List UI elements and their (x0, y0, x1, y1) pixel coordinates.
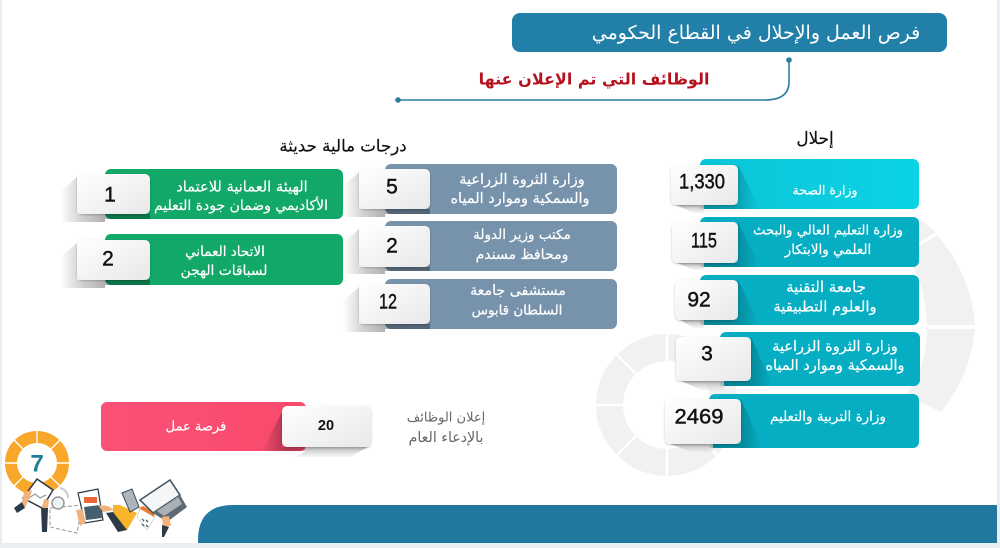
card: job opportunity: 20 (318, 418, 334, 434)
decorative large ring (905, 216, 975, 412)
heading: replacement: إحلال (796, 128, 834, 148)
card: camel racing federation: لسباقات الهجن (181, 263, 267, 279)
card: technology university: جامعة التقنية (786, 278, 866, 296)
card: accreditation authority: الأكاديمي وضمان جودة التعليم (154, 196, 328, 214)
card: higher education (672, 217, 919, 270)
card: agriculture (676, 332, 920, 390)
card: accreditation authority (60, 169, 343, 222)
card: sultan qaboos hospital: السلطان قابوس (472, 304, 562, 318)
card: job opportunity (101, 402, 371, 457)
title banner: فرص العمل والإحلال في القطاع الحكومي (592, 22, 920, 44)
card: camel racing federation: 2 (102, 248, 114, 270)
card: sultan qaboos hospital (343, 279, 617, 332)
bottom bar (198, 505, 997, 543)
card: education (665, 394, 919, 452)
card: higher education: وزارة التعليم العالي والبحث (753, 224, 903, 238)
card: education: 2469 (674, 406, 724, 428)
card: minister of state office: مكتب وزير الدولة (473, 227, 571, 243)
text: public prosecution job ads (407, 410, 485, 446)
card: minister of state office: 2 (386, 234, 398, 258)
card: sultan qaboos hospital: مستشفى جامعة (470, 283, 566, 299)
card: sultan qaboos hospital: 12 (379, 290, 397, 314)
card: agriculture: والسمكية وموارد المياه (765, 358, 905, 374)
card: health (671, 159, 919, 213)
card: health: وزارة الصحة (792, 182, 858, 198)
icon: numbered ring (5, 431, 69, 495)
card: agriculture grades: والسمكية وموارد المياه (450, 191, 590, 207)
card: camel racing federation: الاتحاد العماني (185, 244, 265, 260)
heading: recent financial grades: درجات مالية حديثة (279, 136, 407, 156)
card: technology university: والعلوم التطبيقية (773, 298, 877, 316)
card: agriculture: وزارة الثروة الزراعية (772, 339, 898, 355)
card: camel racing federation (60, 234, 343, 288)
card: job opportunity: فرصة عمل (166, 420, 226, 434)
text: public prosecution job ads: بالإدعاء العام (409, 430, 483, 446)
title banner (512, 13, 947, 52)
card: agriculture: 3 (701, 342, 713, 366)
decorative small ring (592, 330, 742, 480)
card: agriculture grades: وزارة الثروة الزراعية (459, 172, 585, 188)
card: education: وزارة التربية والتعليم (770, 409, 886, 425)
card: agriculture grades: 5 (386, 176, 398, 198)
card: technology university: 92 (687, 288, 711, 312)
card: higher education: 115 (691, 230, 717, 252)
card: health: 1,330 (679, 170, 725, 194)
card: accreditation authority: الهيئة العمانية للاعتماد (176, 178, 308, 196)
card: technology university (675, 275, 919, 328)
card: minister of state office: ومحافظ مسندم (476, 247, 568, 263)
card: agriculture grades (343, 164, 617, 217)
icon: numbered ring: 7 (30, 450, 44, 478)
card: accreditation authority: 1 (104, 184, 116, 206)
card: higher education: العلمي والابتكار (784, 242, 871, 258)
illustration: business desk (14, 479, 187, 537)
connector line (395, 57, 792, 103)
text: public prosecution job ads: إعلان الوظائف (407, 410, 485, 426)
card: minister of state office (343, 221, 617, 274)
subtitle: الوظائف التي تم الإعلان عنها (479, 70, 709, 90)
